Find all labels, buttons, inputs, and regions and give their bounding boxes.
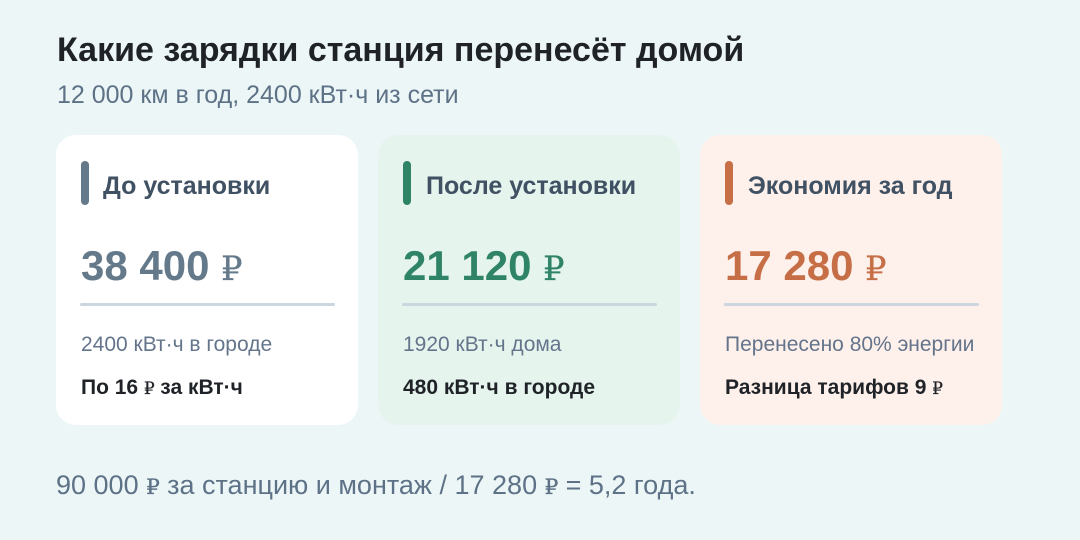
divider: savings <box>724 303 979 306</box>
value: savings: ₽ <box>865 249 887 288</box>
heading: after: После установки <box>426 172 636 200</box>
value: savings: 17 280 <box>725 242 853 289</box>
rate: after: 480 кВт·ч в городе <box>403 376 595 399</box>
detail: after: 1920 кВт·ч дома <box>403 333 561 356</box>
accent bar: before <box>81 161 89 205</box>
footer note: 90 000 за станцию и монтаж / 17 280 = 5,2 года. <box>56 470 696 500</box>
rate: before: По 16 за кВт·ч <box>81 376 243 399</box>
panel: after installation <box>378 135 680 425</box>
detail: before: 2400 кВт·ч в городе <box>81 333 272 356</box>
rate: savings: ₽ <box>932 378 943 398</box>
panel: before installation <box>56 135 358 425</box>
panel: yearly savings <box>700 135 1002 425</box>
value: before: ₽ <box>221 249 243 288</box>
rate: savings: Разница тарифов 9 <box>725 376 926 399</box>
footer note: ₽ <box>545 475 558 500</box>
rate: before: ₽ <box>144 378 155 398</box>
value: after: 21 120 <box>403 242 531 289</box>
heading: before: До установки <box>103 172 270 200</box>
subtitle: 12 000 км в год, 2400 кВт·ч из сети <box>57 81 459 109</box>
accent bar: after <box>403 161 411 205</box>
accent bar: savings <box>725 161 733 205</box>
footer note: ₽ <box>146 475 160 500</box>
heading: savings: Экономия за год <box>748 172 953 200</box>
title: Какие зарядки станция перенесёт домой <box>57 31 744 69</box>
divider: after <box>402 303 657 306</box>
detail: savings: Перенесено 80% энергии <box>725 333 974 356</box>
value: before: 38 400 <box>81 242 209 289</box>
value: after: ₽ <box>543 249 565 288</box>
divider: before <box>80 303 335 306</box>
